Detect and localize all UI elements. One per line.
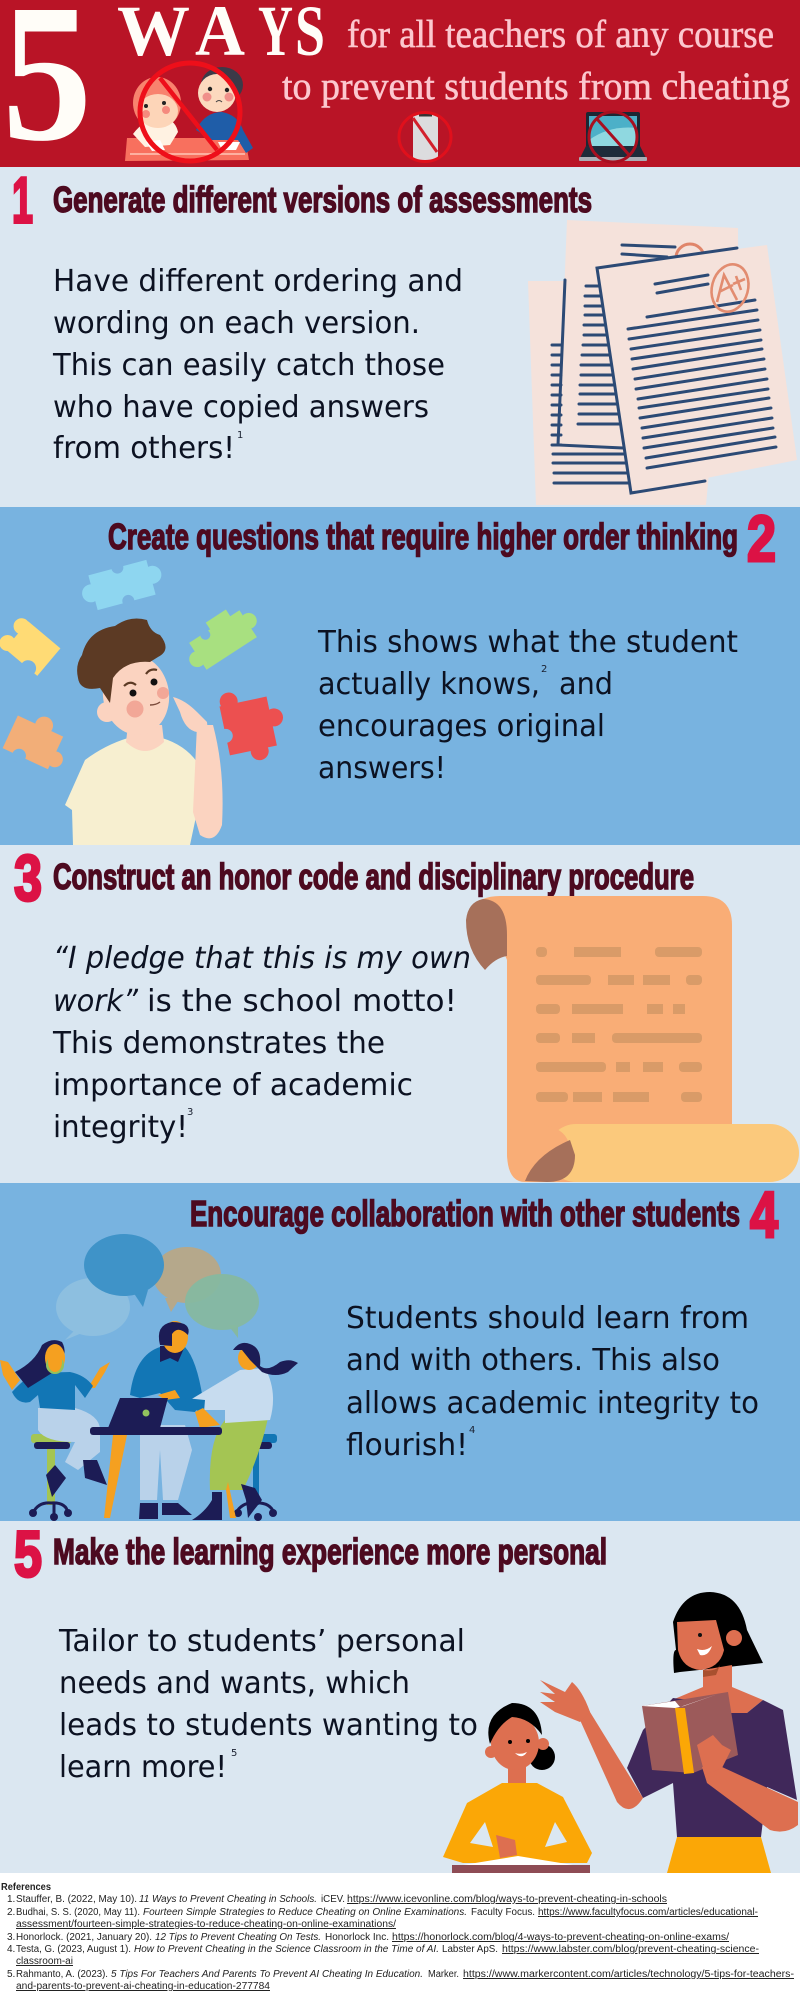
number 3: 3 (14, 842, 42, 914)
reference list: Honorlock Inc. (325, 1932, 389, 1943)
reference list: https://www.markercontent.com/articles/technology/5-tips-for-teachers- (463, 1969, 794, 1980)
body text 5: needs and wants, which (59, 1666, 410, 1701)
body text 3: is the school motto! (147, 984, 457, 1019)
reference list: https://www.facultyfocus.com/articles/educational- (538, 1907, 758, 1918)
body text 5: learn more! (59, 1750, 227, 1785)
illustration: puzzle pieces (0, 551, 291, 780)
body text 2: actually knows, (318, 667, 540, 702)
illustration: student at desk (443, 1703, 592, 1873)
reference list: 12 Tips to Prevent Cheating On Tests. (155, 1932, 321, 1943)
header banner (0, 0, 800, 182)
reference list: 11 Ways to Prevent Cheating in Schools. (139, 1894, 317, 1905)
icon: banned laptop (579, 112, 647, 162)
body text 3: importance of academic (53, 1068, 413, 1103)
reference list: Budhai, S. S. (2020, May 11). (16, 1907, 140, 1918)
number 2: 2 (747, 502, 776, 575)
references (1, 1882, 794, 1992)
body text 5: leads to students wanting to (59, 1708, 478, 1743)
heading 1: Generate different versions of assessments (53, 179, 592, 220)
panel: section 2 (0, 502, 800, 845)
reference list: Marker. (428, 1969, 459, 1980)
reference list (7, 1894, 794, 1992)
reference list: Testa, G. (2023, August 1). (16, 1944, 131, 1955)
reference list: Rahmanto, A. (2023). (16, 1969, 108, 1980)
body text 1: Have different ordering and (53, 264, 463, 299)
number 4: 4 (750, 1178, 778, 1251)
reference list: Fourteen Simple Strategies to Reduce Cheating on Online Examinations. (143, 1907, 467, 1918)
illustration: three people at a table (0, 1321, 298, 1521)
subtitle line 2: to prevent students from cheating (282, 65, 790, 108)
panel: section 5 (0, 1518, 800, 1873)
body text 2: This shows what the student (317, 625, 738, 660)
illustration: teacher with book (540, 1592, 798, 1873)
reference list: and-parents-to-prevent-ai-cheating-in-education-277784 (16, 1981, 270, 1992)
panel: section 1 (0, 164, 800, 507)
references heading: References (1, 1882, 51, 1893)
body text 3 (52, 941, 471, 1145)
reference list: 3. (7, 1932, 15, 1943)
number 1: 1 (12, 164, 33, 236)
reference list: 5 Tips For Teachers And Parents To Prevent AI Cheating In Education. (111, 1969, 423, 1980)
reference list: https://www.icevonline.com/blog/ways-to-prevent-cheating-in-schools (347, 1894, 667, 1905)
reference list: Faculty Focus. (471, 1907, 535, 1918)
body text 3: 3 (187, 1107, 193, 1118)
body text 3: work” (53, 984, 138, 1019)
illustration: thinking boy (65, 618, 223, 845)
illustration: speech bubbles (56, 1234, 259, 1340)
reference list: https://honorlock.com/blog/4-ways-to-prevent-cheating-on-online-exams/ (392, 1932, 729, 1943)
body text 1: 1 (237, 430, 243, 441)
body text 4: and with others. This also (346, 1343, 720, 1378)
body text 1 (52, 264, 463, 466)
subtitle line 1: for all teachers of any course (347, 13, 774, 56)
body text 2: 2 (541, 664, 547, 675)
body text 2: encourages original (318, 709, 605, 744)
heading 5: Make the learning experience more personal (53, 1531, 607, 1572)
body text 3: integrity! (53, 1110, 188, 1145)
body text 2 (317, 625, 738, 786)
body text 4: allows academic integrity to (346, 1386, 759, 1421)
body text 5: 5 (231, 1748, 237, 1759)
icon: two students with prohibition sign (125, 63, 253, 161)
reference list: https://www.labster.com/blog/prevent-cheating-science- (502, 1944, 759, 1955)
reference list: Labster ApS. (442, 1944, 498, 1955)
reference list: Stauffer, B. (2022, May 10). (16, 1894, 137, 1905)
body text 1: who have copied answers (53, 390, 429, 425)
body text 4: flourish! (346, 1428, 468, 1463)
reference list: classroom-ai (16, 1956, 73, 1967)
illustration: stack of graded papers (528, 220, 797, 505)
reference list: 2. (7, 1907, 15, 1918)
body text 2: answers! (318, 751, 446, 786)
body text 4: Students should learn from (346, 1301, 749, 1336)
panel: section 4 (0, 1178, 800, 1521)
reference list: Honorlock. (2021, January 20). (16, 1932, 152, 1943)
body text 5: Tailor to students’ personal (58, 1624, 465, 1659)
body text 4 (346, 1301, 759, 1463)
number 5: 5 (14, 1518, 42, 1590)
body text 1: from others! (53, 431, 235, 466)
body text 1: This can easily catch those (52, 348, 445, 383)
reference list: How to Prevent Cheating in the Science Classroom in the Time of AI. (134, 1944, 439, 1955)
reference list: 1. (7, 1894, 15, 1905)
reference list: iCEV. (321, 1894, 345, 1905)
body text 2: and (559, 667, 613, 702)
body text 3: “I pledge that this is my own (53, 941, 471, 976)
icon: banned phone (399, 112, 451, 162)
body text 3: This demonstrates the (52, 1026, 385, 1061)
reference list: 4. (7, 1944, 15, 1955)
body text 4: 4 (469, 1425, 475, 1436)
reference list: assessment/fourteen-simple-strategies-to-reduce-cheating-on-online-examinations/ (16, 1919, 396, 1930)
body text 5 (58, 1624, 478, 1785)
panel: section 3 (0, 842, 800, 1183)
body text 1: wording on each version. (53, 306, 420, 341)
reference list: 5. (7, 1969, 15, 1980)
illustration: scroll (466, 896, 799, 1182)
